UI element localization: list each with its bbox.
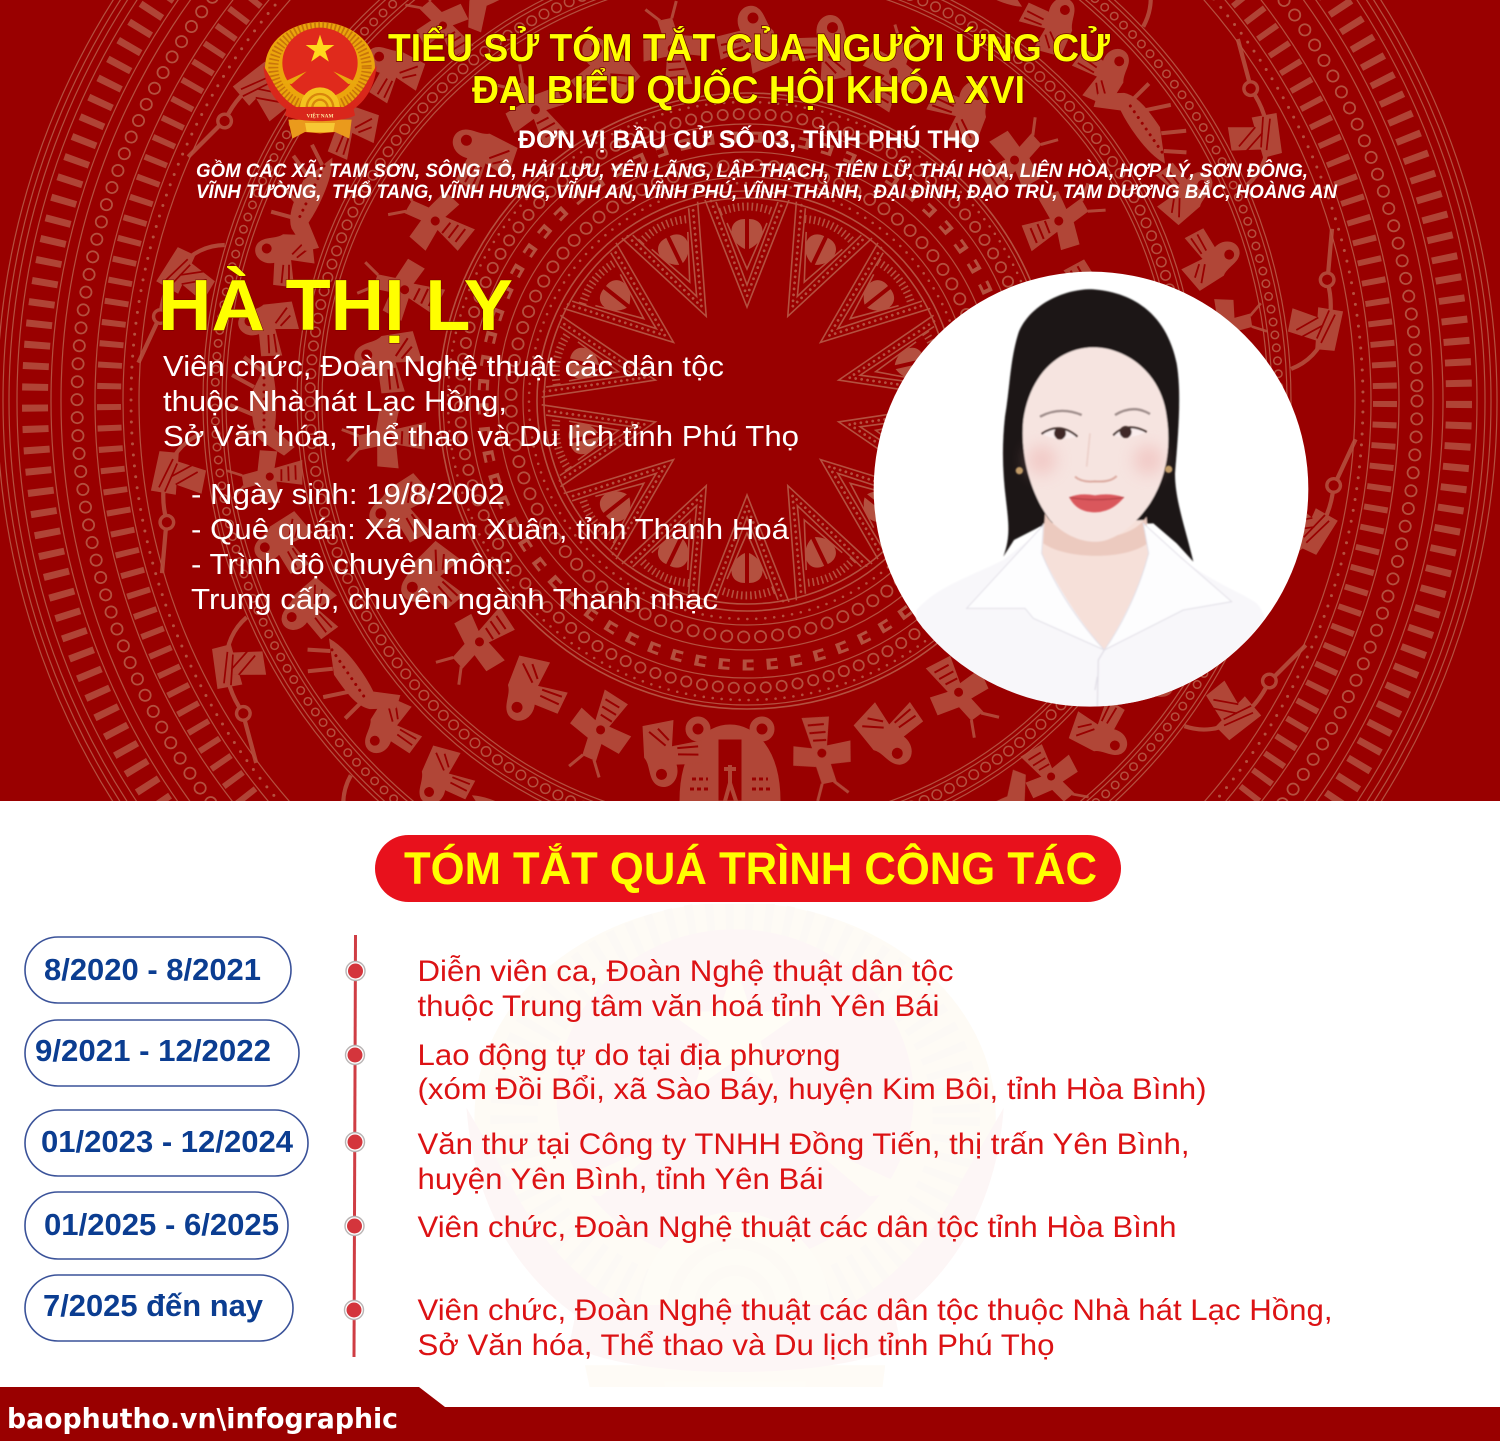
entry 5: Sở Văn hóa, Thể thao và Du lịch tỉnh Phú Thọ xyxy=(418,1329,1054,1362)
title: ĐẠI BIỂU QUỐC HỘI KHÓA XVI xyxy=(472,67,1025,112)
timeline descriptions xyxy=(418,955,1332,1362)
text block: current position: thuộc Nhà hát Lạc Hồng, xyxy=(163,386,507,418)
entry 2: (xóm Đồi Bổi, xã Sào Báy, huyện Kim Bôi, tỉnh Hòa Bình) xyxy=(418,1073,1206,1106)
entry 5: Viên chức, Đoàn Nghệ thuật các dân tộc thuộc Nhà hát Lạc Hồng, xyxy=(418,1294,1332,1327)
heading pill: career summary: TÓM TẮT QUÁ TRÌNH CÔNG TÁC xyxy=(404,843,1097,894)
date pill 5: 7/2025 đến nay xyxy=(43,1288,264,1323)
subtitle: electoral unit: ĐƠN VỊ BẦU CỬ SỐ 03, TỈNH PHÚ THỌ xyxy=(518,124,980,154)
text block: personal details: Trung cấp, chuyên ngành Thanh nhạc xyxy=(191,584,718,616)
footer band: baophutho.vn\infographic xyxy=(7,1402,398,1435)
entry 1: Diễn viên ca, Đoàn Nghệ thuật dân tộc xyxy=(418,955,954,988)
entry 4: Viên chức, Đoàn Nghệ thuật các dân tộc tỉnh Hòa Bình xyxy=(418,1211,1176,1244)
title: TIỂU SỬ TÓM TẮT CỦA NGƯỜI ỨNG CỬ xyxy=(388,25,1111,70)
entry 3: huyện Yên Bình, tỉnh Yên Bái xyxy=(418,1163,824,1196)
date pill 5 xyxy=(25,1275,293,1341)
icon: Vietnam national emblem xyxy=(263,22,377,139)
icon: Vietnam national emblem: VIỆT NAM xyxy=(306,111,333,119)
text block: personal details: - Ngày sinh: 19/8/2002 xyxy=(191,479,505,511)
text block: personal details: - Trình độ chuyên môn: xyxy=(191,549,512,581)
entry 2: Lao động tự do tại địa phương xyxy=(418,1039,840,1072)
entry 5 xyxy=(418,1294,1332,1362)
entry 1 xyxy=(418,955,954,1023)
text block: personal details xyxy=(191,479,790,616)
date pill 3: 01/2023 - 12/2024 xyxy=(41,1124,294,1159)
portrait photo in white circle xyxy=(874,272,1308,720)
text block: list of communes: GỒM CÁC XÃ: TAM SƠN, SÔNG LÔ, HẢI LỰU, YÊN LÃNG, LẬP THẠCH, TIÊN LỮ, THÁI HÒA, LIÊN HÒA, HỢP LÝ, SƠN ĐÔNG, xyxy=(196,160,1308,182)
panel: red candidate header with bronze drum pattern xyxy=(0,0,1500,801)
text block: personal details: - Quê quán: Xã Nam Xuân, tỉnh Thanh Hoá xyxy=(191,514,790,546)
date pill 4: 01/2025 - 6/2025 xyxy=(44,1207,279,1242)
date pill 2 xyxy=(25,1020,299,1086)
text block: current position xyxy=(163,351,799,453)
date pill 4 xyxy=(25,1192,288,1259)
entry 3: Văn thư tại Công ty TNHH Đồng Tiến, thị trấn Yên Bình, xyxy=(418,1128,1190,1161)
title xyxy=(388,25,1111,112)
timeline date pills xyxy=(25,937,308,1341)
footer band xyxy=(0,1387,1500,1441)
date pill 1 xyxy=(25,937,291,1003)
entry 1: thuộc Trung tâm văn hoá tỉnh Yên Bái xyxy=(418,990,940,1023)
bronze drum pattern xyxy=(0,0,1498,801)
date pill 1: 8/2020 - 8/2021 xyxy=(44,952,261,987)
watermark: faint national emblem behind timeline xyxy=(467,904,1004,1387)
text block: current position: Sở Văn hóa, Thể thao và Du lịch tỉnh Phú Thọ xyxy=(163,421,799,453)
date pill 2: 9/2021 - 12/2022 xyxy=(35,1033,271,1068)
entry 3 xyxy=(418,1128,1190,1196)
entry 2 xyxy=(418,1039,1206,1106)
date pill 3 xyxy=(25,1110,308,1176)
timeline axis with markers xyxy=(344,935,365,1357)
text block: current position: Viên chức, Đoàn Nghệ thuật các dân tộc xyxy=(163,351,724,383)
text block: list of communes xyxy=(196,160,1338,203)
candidate name: HÀ THỊ LY xyxy=(158,266,513,346)
text block: list of communes: VĨNH TƯỜNG, THỔ TANG, VĨNH HƯNG, VĨNH AN, VĨNH PHÚ, VĨNH THÀNH, ĐẠI ĐÌNH, ĐẠO TRÙ, TAM DƯƠNG BẮC, HOÀNG AN xyxy=(196,181,1338,203)
